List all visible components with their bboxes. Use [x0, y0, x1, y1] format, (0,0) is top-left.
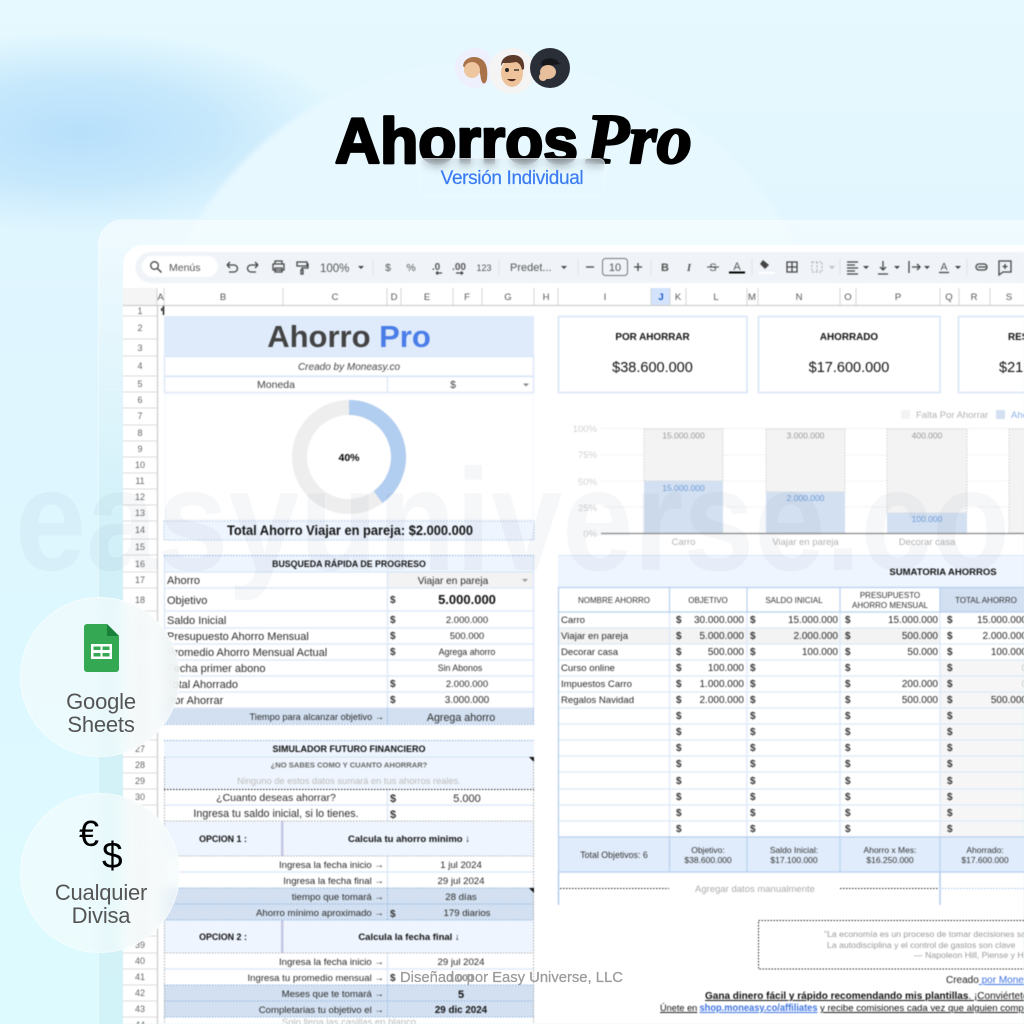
row headers: 24	[135, 695, 145, 705]
toolbar: Predet...	[510, 262, 552, 274]
panel: simulador futuro financiero: $	[390, 793, 396, 805]
summary card: ahorrado	[758, 316, 940, 392]
row headers: 36	[135, 891, 145, 901]
table rows: 5.000.000	[700, 631, 744, 642]
table rows: 500.000	[902, 695, 938, 706]
currency symbols: $	[750, 647, 756, 658]
table totals row: Saldo Inicial:	[770, 845, 818, 855]
row headers: 30	[135, 792, 145, 802]
table rows	[561, 615, 1024, 706]
stacked bar chart: Decorar casa	[899, 537, 956, 548]
table totals row: $16.250.000	[866, 855, 914, 865]
panel: left header	[164, 316, 534, 392]
summary card: ahorrado: $17.600.000	[809, 360, 889, 376]
panel: simulador futuro financiero: Ingresa la fecha inicio →	[279, 860, 384, 871]
panel: busqueda rapida de progreso: Total Ahorrado	[167, 679, 238, 691]
row headers: 41	[135, 972, 145, 982]
table column headers	[578, 591, 1017, 610]
stacked bar chart: 400.000	[912, 430, 943, 440]
table column headers: TOTAL AHORRO	[955, 596, 1017, 605]
panel: simulador futuro financiero: Ingresa tu promedio mensual →	[247, 973, 384, 984]
panel: busqueda rapida de progreso: Por Ahorrar	[167, 695, 224, 707]
panel: busqueda rapida de progreso: Saldo Inicial	[167, 615, 226, 627]
panel: busqueda rapida de progreso: Promedio Ahorro Mensual Actual	[167, 647, 327, 659]
row headers: 22	[135, 663, 145, 673]
panel: left header: Moneda	[257, 379, 295, 391]
credits and affiliate text: shop.moneasy.co/affiliates	[700, 1003, 818, 1014]
row headers: 15	[135, 542, 145, 552]
avatar: man with cap	[530, 48, 570, 88]
summary card: por ahorrar: POR AHORRAR	[615, 332, 690, 343]
row headers: 7	[137, 411, 143, 421]
row headers: 2	[137, 323, 143, 333]
toolbar: B	[661, 262, 669, 274]
row headers: 19	[135, 615, 145, 625]
panel: simulador futuro financiero: 29 jul 2024	[438, 957, 485, 968]
row headers: 32	[135, 825, 145, 835]
stacked bar chart: 2.000.000	[787, 493, 825, 503]
currency symbols: $	[845, 679, 851, 690]
panel: simulador futuro financiero: 29 jul 2024	[438, 876, 485, 887]
currency symbols: $	[947, 615, 953, 626]
stacked bar chart: 15.000.000	[662, 483, 705, 493]
row headers	[123, 305, 164, 1024]
table totals row	[580, 845, 1009, 865]
panel: simulador futuro financiero: Meses que te tomará →	[282, 989, 384, 1000]
panel: busqueda rapida de progreso: 2.000.000	[446, 679, 488, 690]
currency symbols: $	[676, 776, 682, 787]
row headers: 14	[135, 525, 145, 535]
currency symbols: $	[845, 808, 851, 819]
panel: simulador futuro financiero: Ingresa tu saldo inicial, si lo tienes.	[193, 808, 359, 820]
row headers: 13	[135, 508, 145, 518]
column headers: Q	[945, 292, 953, 303]
toolbar: $	[385, 262, 391, 274]
currency symbols: $	[845, 631, 851, 642]
column headers: R	[971, 292, 978, 303]
panel: busqueda rapida de progreso: $	[390, 615, 396, 626]
currency symbols: $	[750, 679, 756, 690]
table totals row: $38.600.000	[684, 855, 732, 865]
column headers: K	[675, 292, 682, 303]
currency symbols: $	[750, 695, 756, 706]
total ahorro banner	[164, 521, 534, 540]
row headers: 29	[135, 776, 145, 786]
currency symbols: $	[845, 727, 851, 738]
icon: currency symbols: $	[102, 835, 123, 876]
table rows: 2.000.000	[700, 695, 744, 706]
table column headers: OBJETIVO	[688, 596, 728, 605]
row headers: 26	[135, 727, 145, 737]
currency symbols: $	[845, 663, 851, 674]
column headers: E	[424, 292, 430, 303]
panel: busqueda rapida de progreso: 2.000.000	[446, 615, 488, 626]
panel: busqueda rapida de progreso: Agrega ahorro	[427, 712, 495, 724]
label: google sheets: Sheets	[67, 712, 135, 737]
panel: simulador futuro financiero: $	[390, 973, 396, 984]
column headers: A	[157, 292, 164, 303]
column headers: G	[504, 292, 512, 303]
currency symbols: $	[947, 695, 953, 706]
table rows: Curso online	[561, 663, 615, 674]
currency symbols: $	[750, 808, 756, 819]
currency symbols: $	[750, 631, 756, 642]
toolbar: A	[733, 261, 741, 273]
table column headers: AHORRO MENSUAL	[852, 601, 929, 610]
currency symbols: $	[845, 824, 851, 835]
stacked bar chart: 75%	[578, 450, 598, 461]
currency symbols: $	[676, 727, 682, 738]
column headers: D	[391, 292, 398, 303]
table rows: 15.000.000	[888, 615, 938, 626]
row headers: 10	[135, 460, 145, 470]
row headers: 39	[135, 940, 145, 950]
toolbar: S	[709, 262, 717, 274]
column headers: B	[220, 292, 226, 303]
search box: Menús	[169, 262, 201, 274]
toolbar: 10	[609, 262, 621, 274]
avatar: man winking	[489, 48, 535, 94]
currency symbols: $	[845, 615, 851, 626]
currency symbols: $	[750, 743, 756, 754]
avatar: woman	[455, 48, 495, 88]
summary card: restante	[958, 316, 1024, 392]
currency symbols: $	[947, 711, 953, 722]
title: Ahorros	[335, 105, 578, 177]
agregar datos manualmente: Agregar datos manualmente	[695, 884, 815, 895]
stacked bar chart: Carro	[672, 537, 695, 548]
column headers: L	[713, 292, 719, 303]
stacked bar chart: 100.000	[912, 514, 943, 524]
toolbar: %	[406, 262, 416, 274]
table rows: 200.000	[902, 679, 938, 690]
table totals row: Total Objetivos: 6	[580, 850, 648, 860]
panel: simulador futuro financiero	[164, 740, 534, 1024]
toolbar: A	[940, 261, 948, 273]
panel: simulador futuro financiero: 28 días	[445, 892, 477, 903]
row headers: 11	[135, 476, 145, 486]
currency symbols: $	[750, 824, 756, 835]
currency symbols: $	[750, 663, 756, 674]
row headers: 18	[135, 595, 145, 605]
row headers: 1	[137, 306, 143, 316]
column headers: C	[332, 292, 339, 303]
panel: simulador futuro financiero: 179 diarios	[444, 908, 491, 919]
sheet background	[123, 245, 1024, 1024]
summary card: por ahorrar: $38.600.000	[612, 360, 693, 376]
table totals row: $17.600.000	[961, 855, 1009, 865]
table rows: 50.000	[907, 647, 938, 658]
table rows: 500.000	[902, 631, 938, 642]
stacked bar chart: Viajar en pareja	[772, 537, 839, 548]
row headers: 17	[135, 575, 145, 585]
row headers: 31	[135, 808, 145, 818]
panel: busqueda rapida de progreso: 5.000.000	[438, 592, 496, 607]
panel: simulador futuro financiero: $	[390, 909, 396, 920]
panel: busqueda rapida de progreso: Sin Abonos	[438, 663, 483, 673]
panel: simulador futuro financiero: 5	[458, 989, 464, 1001]
currency symbols: $	[750, 711, 756, 722]
row headers: 3	[137, 343, 143, 353]
column headers	[123, 288, 1024, 306]
row headers: 4	[137, 361, 143, 371]
credits and affiliate text	[660, 975, 1024, 1014]
panel: simulador futuro financiero: OPCION 2 :	[199, 932, 247, 942]
panel: simulador futuro financiero: Completarias tu objetivo el →	[259, 1005, 384, 1016]
row headers: 34	[135, 859, 145, 869]
badge: version individual	[419, 158, 605, 196]
toolbar	[135, 252, 1024, 283]
table rows: Decorar casa	[561, 647, 619, 658]
panel: busqueda rapida de progreso: $	[390, 595, 396, 606]
column headers: S	[1006, 292, 1012, 303]
panel: simulador futuro financiero: Ingresa la fecha final →	[283, 876, 384, 887]
stacked bar chart: 25%	[578, 503, 598, 514]
row headers: 43	[135, 1004, 145, 1014]
total ahorro banner: Total Ahorro Viajar en pareja: $2.000.000	[227, 523, 473, 538]
label: cualquier divisa: Divisa	[72, 903, 130, 928]
currency symbols: $	[750, 792, 756, 803]
donut chart	[166, 394, 534, 520]
column headers: P	[895, 292, 901, 303]
badge: version individual: Versión Individual	[441, 168, 583, 189]
row headers: 33	[135, 842, 145, 852]
icon: currency symbols: €	[79, 813, 99, 854]
row headers: 12	[135, 492, 145, 502]
icon: currency symbols	[79, 813, 123, 876]
currency symbols: $	[947, 727, 953, 738]
table rows: Viajar en pareja	[561, 631, 629, 642]
toolbar: I	[686, 262, 692, 274]
panel: busqueda rapida de progreso: Presupuesto Ahorro Mensual	[167, 631, 309, 643]
panel: busqueda rapida de progreso: Objetivo	[167, 595, 207, 607]
credits and affiliate text: Únete en	[660, 1003, 697, 1013]
title	[335, 101, 692, 179]
currency symbols: $	[676, 663, 682, 674]
currency symbols: $	[845, 792, 851, 803]
panel: busqueda rapida de progreso: $	[390, 631, 396, 642]
currency symbols: $	[750, 615, 756, 626]
label: google sheets	[66, 689, 136, 737]
row headers: 37	[135, 907, 145, 917]
table rows: 2.000.000	[794, 631, 838, 642]
row headers: 42	[135, 988, 145, 998]
stacked bar chart: 3.000.000	[787, 430, 825, 440]
panel: busqueda rapida de progreso: 3.000.000	[445, 695, 490, 706]
row headers: 40	[135, 956, 145, 966]
stacked bar chart: 15.000.000	[662, 430, 705, 440]
panel: busqueda rapida de progreso: Fecha primer abono	[167, 663, 265, 675]
stacked bar chart: 50%	[578, 477, 598, 488]
currency symbols: $	[947, 792, 953, 803]
table column headers: NOMBRE AHORRO	[578, 596, 650, 605]
panel: busqueda rapida de progreso: $	[390, 647, 396, 658]
stacked bar chart: 0%	[583, 529, 598, 540]
column headers: H	[543, 292, 550, 303]
panel: simulador futuro financiero: 5.000	[453, 793, 481, 805]
panel: busqueda rapida de progreso: 500.000	[450, 631, 484, 642]
quote box: La autodisciplina y el control de gastos son clave	[827, 940, 1016, 950]
agregar datos manualmente	[558, 872, 1024, 905]
currency symbols: $	[676, 695, 682, 706]
panel: simulador futuro financiero: Ahorro mínimo aproximado →	[256, 908, 384, 919]
panel: busqueda rapida de progreso: BUSQUEDA RÁPIDA DE PROGRESO	[272, 559, 426, 569]
panel: simulador futuro financiero: $	[390, 809, 396, 821]
table column headers: PRESUPUESTO	[860, 591, 920, 600]
column headers: I	[604, 292, 606, 303]
stacked bar chart: 100%	[573, 424, 598, 435]
table rows: 15.000.000	[788, 615, 838, 626]
chart legend	[901, 410, 1024, 421]
currency symbols: $	[845, 776, 851, 787]
row headers: 16	[135, 559, 145, 569]
panel: simulador futuro financiero: ¿Cuanto deseas ahorrar?	[216, 792, 336, 804]
row headers: 27	[135, 744, 145, 754]
table rows: 100.000	[708, 663, 744, 674]
toolbar: .0	[432, 262, 441, 273]
panel: simulador futuro financiero: 1.000	[449, 973, 473, 984]
chart legend: Falta Por Ahorrar	[916, 410, 988, 421]
glass panel behind spreadsheet	[98, 219, 1024, 1024]
toolbar: .00	[452, 262, 466, 273]
icon: google sheets	[84, 624, 119, 672]
currency symbols: $	[676, 808, 682, 819]
toolbar: 100%	[320, 263, 349, 275]
panel: simulador futuro financiero: ¿NO SABES COMO Y CUANTO AHORRAR?	[271, 760, 428, 770]
panel: simulador futuro financiero: OPCION 1 :	[199, 834, 247, 844]
currency symbols	[676, 615, 953, 835]
row headers: 23	[135, 679, 145, 689]
toolbar: 123	[476, 263, 492, 273]
row headers: 6	[137, 395, 143, 405]
table rows: Regalos Navidad	[561, 695, 634, 706]
panel: busqueda rapida de progreso: Viajar en pareja	[418, 576, 489, 587]
label: cualquier divisa	[55, 880, 147, 928]
search box	[142, 256, 218, 277]
panel: simulador futuro financiero: SIMULADOR FUTURO FINANCIERO	[272, 744, 426, 754]
currency symbols: $	[676, 743, 682, 754]
label: cualquier divisa: Cualquier	[55, 880, 147, 905]
row headers: 8	[137, 428, 143, 438]
currency symbols: $	[676, 679, 682, 690]
panel: left header: Ahorro Pro	[267, 319, 431, 354]
table rows: Impuestos Carro	[561, 679, 632, 690]
summary card: ahorrado: AHORRADO	[820, 332, 878, 343]
row headers: 21	[135, 647, 145, 657]
currency symbols: $	[947, 631, 953, 642]
table rows: 30.000.000	[694, 615, 744, 626]
row headers: 5	[137, 379, 143, 389]
panel: simulador futuro financiero: Calcula la fecha final ↓	[358, 932, 460, 943]
panel: simulador futuro financiero: Ninguno de estos datos sumará en tus ahorros reales.	[237, 776, 461, 786]
avatars	[456, 48, 570, 94]
column headers: J	[658, 292, 664, 303]
stacked bar chart	[573, 410, 1024, 548]
summary card: por ahorrar	[558, 316, 747, 392]
panel: simulador futuro financiero: 1 jul 2024	[440, 860, 482, 871]
table rows: 1.000.000	[700, 679, 744, 690]
badge: cualquier divisa	[20, 793, 180, 953]
currency symbols: $	[845, 695, 851, 706]
currency symbols: $	[947, 679, 953, 690]
currency symbols: $	[947, 743, 953, 754]
table rows: 500.000	[708, 647, 744, 658]
currency symbols: $	[676, 792, 682, 803]
currency symbols: $	[947, 663, 953, 674]
currency symbols: $	[947, 647, 953, 658]
panel: left header: Creado by Moneasy.co	[298, 362, 400, 373]
currency symbols: $	[947, 808, 953, 819]
currency symbols: $	[750, 727, 756, 738]
currency symbols: $	[676, 631, 682, 642]
row headers: 9	[137, 444, 143, 454]
panel: simulador futuro financiero: tiempo que tomará →	[292, 892, 384, 903]
currency symbols: $	[845, 743, 851, 754]
table: sumatoria ahorros	[558, 555, 1024, 905]
table rows: 100.000	[802, 647, 838, 658]
column headers: F	[464, 292, 470, 303]
table rows: Carro	[561, 615, 585, 626]
donut chart: 40%	[338, 452, 360, 464]
table totals row: $17.100.000	[770, 855, 818, 865]
panel: simulador futuro financiero: Ingresa la fecha inicio →	[279, 957, 384, 968]
panel: busqueda rapida de progreso: Ahorro	[167, 575, 200, 587]
panel: busqueda rapida de progreso: $	[390, 695, 396, 706]
row headers: 25	[135, 711, 145, 721]
table totals row: Objetivo:	[691, 845, 725, 855]
row headers: 20	[135, 631, 145, 641]
table: sumatoria ahorros: SUMATORIA AHORROS	[889, 567, 997, 578]
currency symbols: $	[676, 647, 682, 658]
currency symbols: $	[676, 759, 682, 770]
currency symbols: $	[845, 647, 851, 658]
column headers: M	[748, 292, 756, 303]
quote box	[758, 920, 1024, 969]
panel: busqueda rapida de progreso: Tiempo para alcanzar objetivo →	[250, 712, 384, 722]
currency symbols: $	[947, 776, 953, 787]
panel: simulador futuro financiero: Calcula tu ahorro minimo ↓	[348, 834, 470, 845]
currency symbols: $	[750, 776, 756, 787]
table column headers: SALDO INICIAL	[765, 596, 823, 605]
panel: busqueda rapida de progreso: $	[390, 679, 396, 690]
label: google sheets: Google	[66, 689, 136, 714]
column headers: O	[844, 292, 852, 303]
currency symbols: $	[845, 711, 851, 722]
currency symbols: $	[845, 759, 851, 770]
currency symbols: $	[676, 824, 682, 835]
table totals row: Ahorro x Mes:	[864, 845, 916, 855]
currency symbols: $	[750, 759, 756, 770]
currency symbols: $	[676, 711, 682, 722]
currency symbols: $	[947, 759, 953, 770]
column headers: N	[796, 292, 803, 303]
row headers: 35	[135, 875, 145, 885]
currency symbols: $	[676, 615, 682, 626]
table totals row: Ahorrado:	[966, 845, 1004, 855]
title: Pro	[585, 101, 692, 179]
panel: busqueda rapida de progreso	[164, 555, 534, 724]
currency symbols: $	[947, 824, 953, 835]
panel: busqueda rapida de progreso: Agrega ahorro	[439, 647, 495, 657]
footer credit: Diseñado por Easy Universe, LLC	[400, 970, 623, 986]
row headers: 38	[135, 923, 145, 933]
badge: google sheets	[20, 597, 180, 757]
panel: left header: $	[450, 379, 456, 391]
row headers: 28	[135, 760, 145, 770]
panel: simulador futuro financiero: 29 dic 2024	[435, 1005, 488, 1016]
